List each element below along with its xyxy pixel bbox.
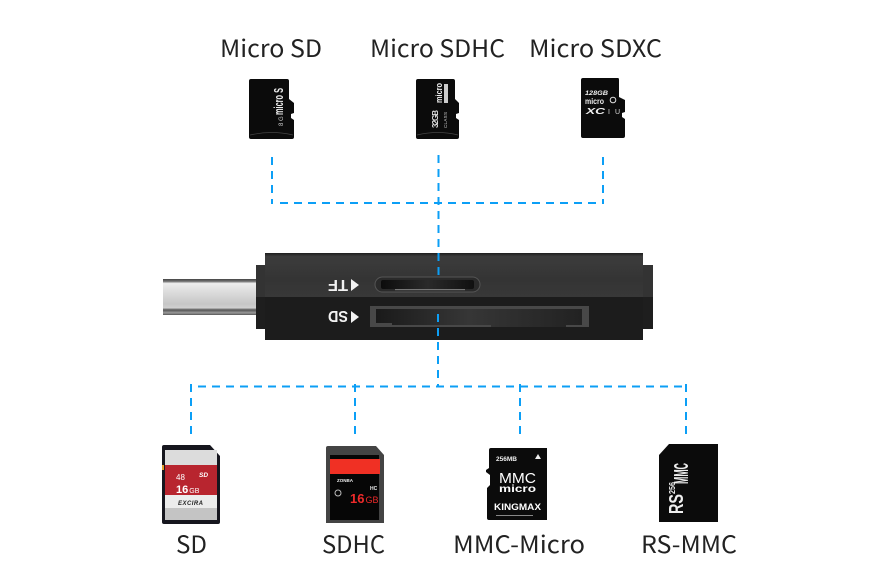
- icon: Micro SD card: micro S: [271, 88, 286, 115]
- icon: Micro SDXC card: I U: [608, 109, 620, 116]
- icon: SD card: 16GB: [176, 484, 200, 496]
- USB connector: [163, 279, 256, 315]
- SD slot: [370, 306, 589, 327]
- icon: RS-MMC card: [659, 444, 718, 522]
- TF slot: [375, 277, 480, 292]
- TF label: TF: [328, 276, 348, 293]
- icon: MMC micro card: KINGMAX: [494, 502, 541, 512]
- icon: MMC micro card: micro: [499, 484, 536, 495]
- connector: dashed lines to full-size cards: [191, 314, 686, 435]
- collar: [256, 265, 653, 329]
- icon: SDHC card: HC: [370, 486, 378, 492]
- icon: Micro SDHC card: CLASS: [443, 112, 448, 128]
- label: SDHC: SDHC: [322, 525, 385, 560]
- icon: MMC micro card: 256MB: [496, 456, 517, 463]
- heading: Micro SD: Micro SD: [220, 29, 322, 64]
- icon: Micro SDXC card: XC: [584, 107, 605, 116]
- label: MMC-Micro: MMC-Micro: [453, 525, 585, 560]
- icon: MMC micro card: [486, 448, 547, 520]
- icon: SD card: EXCIRA: [178, 501, 203, 507]
- icon: SDHC card: ZONBA: [337, 478, 354, 483]
- icon: MMC micro card: MMC: [499, 470, 536, 487]
- icon: Micro SD card: 8 G: [279, 116, 285, 126]
- icon: Micro SD card: [249, 79, 294, 139]
- heading: Micro SDHC: Micro SDHC: [370, 29, 505, 64]
- TF label: [328, 276, 359, 293]
- icon: SDHC card: 16GB: [350, 491, 378, 506]
- icon: SD card: [162, 445, 220, 524]
- reader body: [265, 253, 643, 340]
- icon: Micro SDHC card: 32GB: [431, 110, 440, 128]
- icon: SD card: SD: [199, 472, 208, 479]
- connector: dashed lines to micro cards: [272, 155, 603, 276]
- icon: Micro SDXC card: 128GB: [585, 90, 608, 97]
- label: RS-MMC: RS-MMC: [641, 525, 737, 560]
- heading: Micro SDXC: Micro SDXC: [529, 29, 662, 64]
- icon: RS-MMC card: 256: [668, 482, 677, 494]
- icon: RS-MMC card: MMC: [671, 463, 693, 484]
- icon: SDHC card: [326, 446, 384, 523]
- icon: SD card: 48: [176, 473, 185, 482]
- icon: Micro SDHC card: micro: [434, 83, 444, 103]
- icon: Micro SDXC card: micro: [585, 97, 604, 106]
- icon: Micro SDHC card: [416, 79, 459, 139]
- card reader device: [163, 253, 653, 340]
- icon: Micro SDXC card: [581, 78, 625, 138]
- SD label: SD: [328, 307, 348, 324]
- SD label: [328, 307, 359, 324]
- icon: RS-MMC card: RS: [666, 494, 688, 514]
- label: SD: SD: [176, 525, 207, 560]
